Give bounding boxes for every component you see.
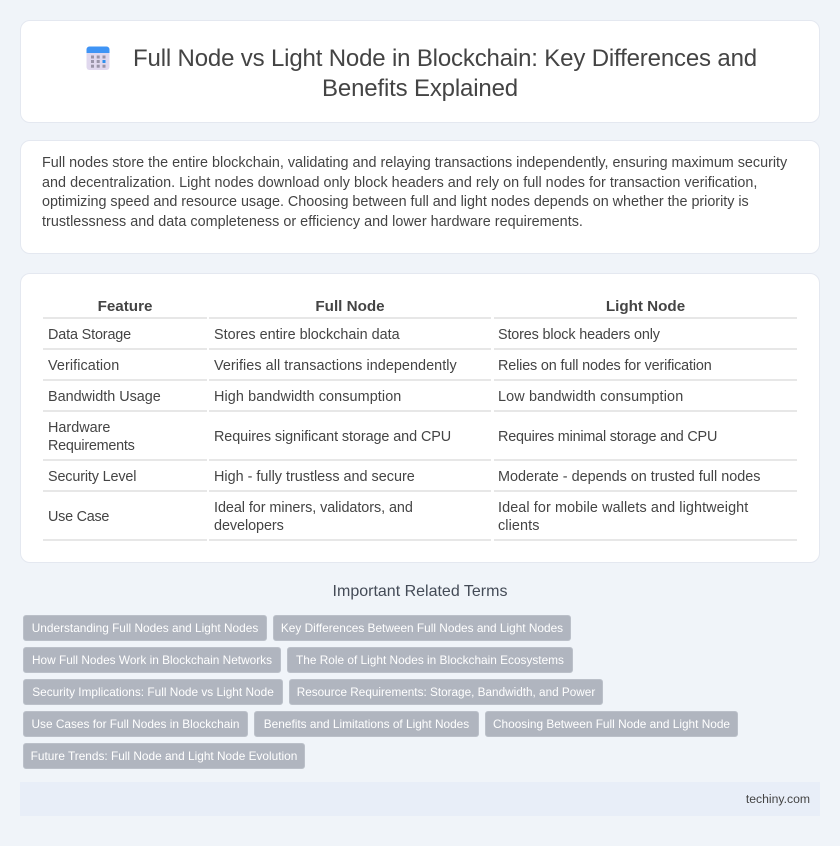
row: hardware requirements: Requires minimal storage and CPU <box>498 429 717 445</box>
tag <box>23 711 248 737</box>
tag <box>23 647 281 673</box>
panel: title card <box>20 20 820 123</box>
tag: Benefits and Limitations of Light Nodes <box>264 717 469 731</box>
tag: Understanding Full Nodes and Light Nodes <box>32 621 258 635</box>
row: bandwidth usage: Bandwidth Usage <box>48 389 161 405</box>
row: use case: developers <box>214 518 284 534</box>
row: hardware requirements <box>48 420 717 454</box>
tag <box>273 615 571 641</box>
icon: calendar grid <box>86 46 110 70</box>
row: verification: Verification <box>48 358 119 374</box>
row: use case: clients <box>498 518 540 534</box>
row: use case <box>48 500 748 534</box>
intro text <box>42 155 788 230</box>
intro text: Full nodes store the entire blockchain, validating and relaying transactions independently, ensuring maximum security <box>42 155 787 171</box>
row: bandwidth usage: Low bandwidth consumption <box>498 389 683 405</box>
tag list: related terms <box>23 615 738 769</box>
row: bandwidth usage: High bandwidth consumption <box>214 389 401 405</box>
comparison table <box>43 317 797 541</box>
tag: Resource Requirements: Storage, Bandwidth, and Power <box>297 686 595 699</box>
row: use case: Ideal for miners, validators, and <box>214 500 413 516</box>
tag <box>289 679 603 705</box>
row: use case: Use Case <box>48 509 109 525</box>
row: bandwidth usage <box>48 389 683 405</box>
tag <box>485 711 738 737</box>
row: verification: Relies on full nodes for verification <box>498 358 712 374</box>
table header: Full Node: Full Node <box>315 298 385 315</box>
tag: The Role of Light Nodes in Blockchain Ecosystems <box>296 653 564 667</box>
row: data storage: Stores block headers only <box>498 327 660 343</box>
panel: table card <box>20 273 820 563</box>
row: hardware requirements: Hardware <box>48 420 110 436</box>
tag <box>287 647 573 673</box>
title <box>133 45 757 102</box>
row: verification: Verifies all transactions independently <box>214 358 457 374</box>
tag: Choosing Between Full Node and Light Node <box>493 717 730 731</box>
tag <box>23 743 305 769</box>
heading: related terms: Important Related Terms <box>333 583 507 600</box>
row: security level <box>48 469 760 485</box>
row: data storage: Data Storage <box>48 327 131 343</box>
footer text: techiny.com <box>746 792 810 806</box>
row: data storage <box>48 327 660 343</box>
row: use case: Ideal for mobile wallets and lightweight <box>498 500 748 516</box>
title: Benefits Explained <box>322 75 518 102</box>
intro text: and decentralization. Light nodes download only block headers and rely on full nodes for transaction verification, <box>42 175 757 191</box>
footer bar <box>20 782 820 816</box>
panel: intro card <box>20 140 820 254</box>
row: verification <box>48 358 712 374</box>
tag: Future Trends: Full Node and Light Node Evolution <box>31 749 297 763</box>
title: Full Node vs Light Node in Blockchain: Key Differences and <box>133 45 757 72</box>
tag: Security Implications: Full Node vs Light Node <box>32 685 274 699</box>
tag: Use Cases for Full Nodes in Blockchain <box>31 717 240 731</box>
tag: Key Differences Between Full Nodes and Light Nodes <box>281 621 563 635</box>
tag <box>254 711 479 737</box>
tag <box>23 679 283 705</box>
intro text: optimizing speed and resource usage. Choosing between full and light nodes depends on whether the priority is <box>42 194 749 210</box>
row: data storage: Stores entire blockchain data <box>214 327 400 343</box>
tag: How Full Nodes Work in Blockchain Networks <box>32 653 272 667</box>
table header: Feature: Feature <box>98 298 152 315</box>
row: hardware requirements: Requirements <box>48 438 135 454</box>
row: security level: Moderate - depends on trusted full nodes <box>498 469 760 485</box>
row: security level: Security Level <box>48 469 136 485</box>
table header: Light Node: Light Node <box>606 298 685 315</box>
row: hardware requirements: Requires significant storage and CPU <box>214 429 451 445</box>
intro text: trustlessness and data completeness or efficiency and lower hardware requirements. <box>42 214 583 230</box>
row: security level: High - fully trustless and secure <box>214 469 415 485</box>
tag <box>23 615 267 641</box>
